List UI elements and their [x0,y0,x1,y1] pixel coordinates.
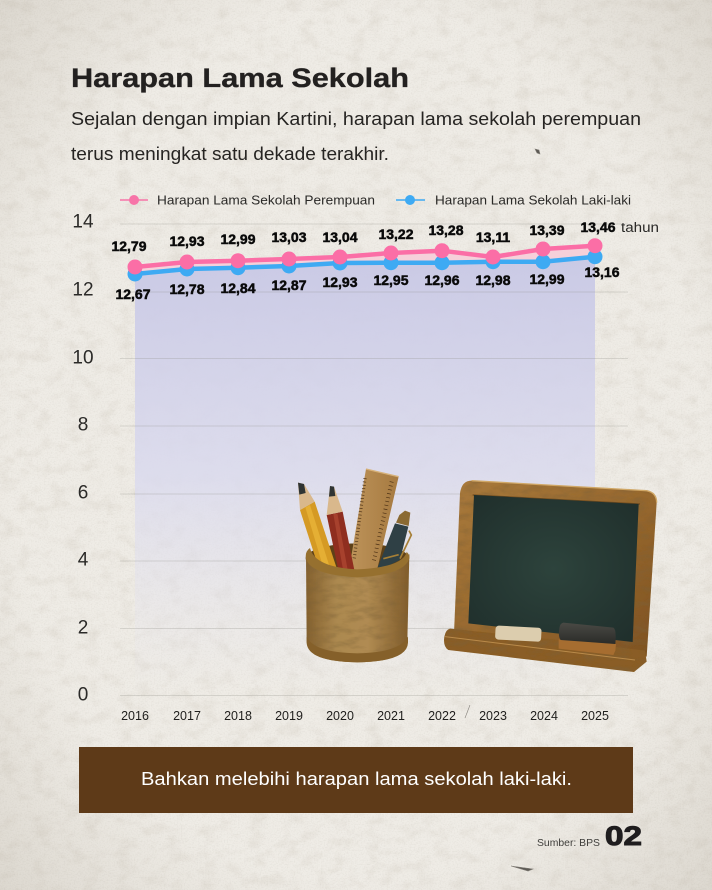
values: perempuan: 12,79 [111,238,147,254]
values: laki-laki: 12,99 [529,271,565,287]
eraser [559,623,616,655]
values: laki-laki: 12,93 [322,274,358,290]
x axis labels: 2020 [326,709,354,723]
cup body [306,554,409,662]
values: perempuan: 13,39 [529,222,565,238]
x axis labels: 2018 [224,709,252,723]
y axis labels: 14 [72,212,94,232]
title: Harapan Lama Sekolah [71,63,409,93]
icon: ruler [349,469,399,572]
legend: laki-laki: Harapan Lama Sekolah Laki-laki [435,194,631,208]
y axis labels: 12 [72,280,94,300]
x axis labels: 2023 [479,709,507,723]
frame [454,481,657,657]
x axis labels: 2022 [428,709,456,723]
callout banner [79,747,633,813]
values: perempuan: 13,22 [378,226,414,242]
values: perempuan: 12,99 [220,231,256,247]
values: laki-laki: 12,87 [271,277,307,293]
values: perempuan [111,219,659,254]
y axis labels: 6 [78,482,88,504]
values: perempuan: 13,11 [476,229,510,245]
series: perempuan [128,238,602,274]
callout banner: Bahkan melebihi harapan lama sekolah laki-laki. [141,769,572,789]
x axis labels: 2017 [173,709,201,723]
values: perempuan: 13,46 [580,219,616,235]
y axis labels: 0 [78,684,88,706]
values: perempuan: 13,03 [271,229,307,245]
x axis labels: 2024 [530,709,558,723]
intro text: terus meningkat satu dekade terakhir. [71,144,389,164]
page number: 02 [605,821,642,851]
x axis labels: 2025 [581,709,609,723]
y axis labels: 2 [78,618,88,638]
source: Sumber: BPS [537,837,600,849]
y axis labels: 8 [78,414,88,436]
values: laki-laki: 13,16 [584,264,620,280]
intro text [71,109,641,164]
values: laki-laki [115,264,620,302]
area under laki-laki line [135,257,595,695]
x axis labels: 2021 [377,709,405,723]
x axis labels [121,709,609,723]
illustration: chalkboard [444,481,657,672]
values: perempuan: 13,28 [428,222,464,238]
slate [468,495,639,642]
chalk [495,625,542,642]
intro text: Sejalan dengan impian Kartini, harapan lama sekolah perempuan [71,109,641,129]
y axis labels [72,212,94,706]
icon: pen [376,511,411,572]
values: laki-laki: 12,96 [424,272,460,288]
values: perempuan: 12,93 [169,233,205,249]
values: laki-laki: 12,84 [220,280,256,296]
line chart [72,212,659,723]
ledge [444,629,647,672]
values: laki-laki: 12,98 [475,272,511,288]
x axis labels: 2016 [121,709,149,723]
y axis labels: 10 [72,348,94,368]
values: laki-laki: 12,95 [373,272,409,288]
cup back rim [306,543,409,573]
x axis labels: 2019 [275,709,303,723]
legend [120,194,631,208]
area between lines [135,246,595,274]
series: laki-laki [128,249,602,282]
values: perempuan: 13,04 [322,229,358,245]
values: laki-laki: 12,78 [169,281,205,297]
values: laki-laki: 12,67 [115,286,151,302]
legend: perempuan: Harapan Lama Sekolah Perempuan [157,194,375,208]
icon: red pencil [327,486,355,572]
values: perempuan: tahun [621,220,659,235]
illustration: pencil cup [298,469,411,662]
y axis labels: 4 [78,550,89,570]
icon: yellow pencil [298,483,337,570]
